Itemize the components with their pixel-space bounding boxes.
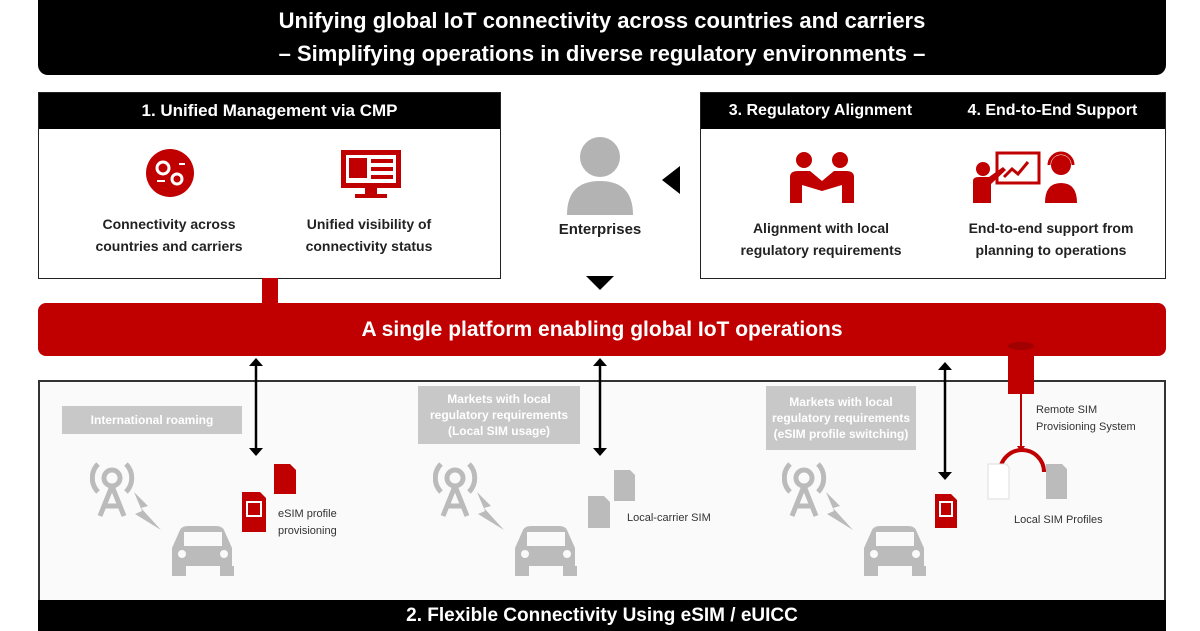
arrow: left xyxy=(662,166,680,194)
text: eSIM profile provisioning: eSIM profile xyxy=(278,508,337,520)
scenario: profile switching: Markets with local xyxy=(789,395,893,409)
text: alignment: regulatory requirements xyxy=(740,242,902,258)
footer heading: 2. Flexible Connectivity Using eSIM / eUICC xyxy=(406,604,798,626)
panel: unified management xyxy=(38,92,501,279)
scenario: international roaming: International roaming xyxy=(91,413,213,427)
scenario: local SIM xyxy=(418,386,580,444)
icon: presentation and headset xyxy=(973,152,1077,203)
text: enterprises: Enterprises xyxy=(559,221,641,238)
panel heading xyxy=(701,93,1165,129)
scenario: local SIM: regulatory requirements xyxy=(430,408,568,422)
arrow: double 3 xyxy=(938,362,952,480)
text: connectivity: Connectivity across xyxy=(102,216,236,232)
title xyxy=(38,0,1166,75)
panel: regulatory and support xyxy=(700,92,1166,279)
icon: RSP system xyxy=(988,342,1067,500)
scenario: local SIM: (Local SIM usage) xyxy=(448,424,550,438)
icon: eSIM red 1 xyxy=(242,464,296,532)
enterprises xyxy=(559,137,641,238)
title: – Simplifying operations in diverse regulatory environments – xyxy=(279,41,925,66)
icon group: tower + car 1 xyxy=(90,462,234,576)
text: visibility xyxy=(306,216,432,254)
text: end-to-end: planning to operations xyxy=(976,242,1126,258)
text: connectivity: countries and carriers xyxy=(95,238,243,254)
footer heading xyxy=(38,600,1166,631)
icon: person xyxy=(567,137,633,215)
text: RSP: Provisioning System xyxy=(1036,421,1136,433)
panel heading xyxy=(39,93,500,129)
icon: connectivity gears xyxy=(146,149,194,197)
arrow: double 1 xyxy=(249,358,263,456)
text: visibility: connectivity status xyxy=(306,238,432,254)
panel heading: 4. End-to-End Support xyxy=(968,102,1137,119)
scenario: local SIM: Markets with local xyxy=(447,392,551,406)
text: visibility: Unified visibility of xyxy=(307,216,431,232)
icon: handshake people xyxy=(790,152,854,203)
red platform bar xyxy=(38,303,1166,356)
text: end-to-end xyxy=(969,220,1133,258)
icon: eSIM red 3 xyxy=(935,494,957,528)
title: Unifying global IoT connectivity across countries and carriers xyxy=(279,8,925,33)
text: alignment xyxy=(740,220,902,258)
red platform bar: A single platform enabling global IoT operations xyxy=(361,318,843,341)
panel: flexible connectivity xyxy=(38,380,1166,629)
text: eSIM profile provisioning: provisioning xyxy=(278,525,337,537)
icon: monitor xyxy=(341,150,401,198)
scenario: profile switching xyxy=(766,386,916,450)
text: RSP xyxy=(1036,404,1136,433)
scenario: profile switching: regulatory requirements xyxy=(772,411,910,425)
arrow: double 2 xyxy=(593,358,607,456)
icon: local-carrier SIM xyxy=(588,470,635,528)
arrow: down xyxy=(586,276,614,290)
text: end-to-end: End-to-end support from xyxy=(969,220,1133,236)
connector xyxy=(262,278,278,304)
text: local-carrier SIM: Local-carrier SIM xyxy=(627,512,711,524)
text: alignment: Alignment with local xyxy=(753,220,889,236)
text: RSP: Remote SIM xyxy=(1036,404,1097,416)
scenario: profile switching: (eSIM profile switching) xyxy=(774,427,908,441)
text: eSIM profile provisioning xyxy=(278,508,337,537)
text: connectivity xyxy=(95,216,243,254)
text: local SIM profiles: Local SIM Profiles xyxy=(1014,514,1103,526)
panel heading: 3. Regulatory Alignment xyxy=(729,102,912,119)
panel heading: 1. Unified Management via CMP xyxy=(142,101,398,120)
